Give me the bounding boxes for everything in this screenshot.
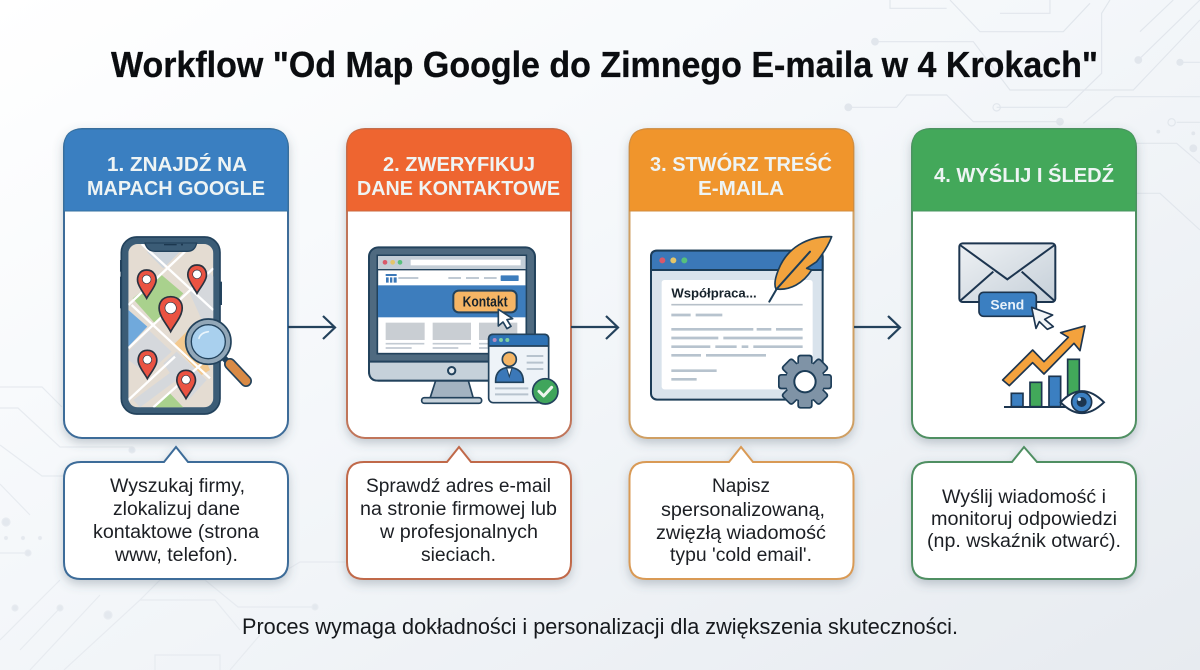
callout: step 1 description: Wyszukaj firmy, — [110, 476, 245, 497]
callout: step 2 description: na stronie firmowej lub — [360, 499, 557, 520]
callout: step 3 description: typu 'cold email'. — [670, 545, 812, 566]
callout: step 3 description: zwięzłą wiadomość — [656, 523, 826, 544]
callout: step 1 description: kontaktowe (strona — [93, 522, 259, 543]
icon: e-mail window with feather and gear: Współpraca... — [671, 285, 757, 300]
callout: step 2 description — [347, 447, 571, 579]
callout: step 3 description: spersonalizowaną, — [661, 500, 825, 521]
arrow: step 3 to step 4 — [854, 316, 900, 339]
callout: step 4 description — [912, 447, 1136, 579]
callout: step 3 description — [630, 447, 854, 579]
panel: step 3 create e-mail content — [630, 129, 854, 438]
callout: step 1 description: www, telefon). — [114, 545, 238, 566]
heading: step 2: 2. ZWERYFIKUJ — [383, 153, 535, 176]
panel: step 2 verify contact data — [347, 129, 571, 438]
heading: step 1: 1. ZNAJDŹ NA — [107, 153, 247, 176]
heading: step 1 — [87, 153, 265, 200]
heading: step 3 — [650, 152, 832, 200]
footer note: Proces wymaga dokładności i personalizacji dla zwiększenia skuteczności. — [242, 614, 958, 639]
callout: step 3 description: Napisz — [712, 476, 770, 497]
icon: smartphone with map, pins and magnifier — [120, 237, 246, 414]
heading: step 3: E-MAILA — [698, 177, 784, 200]
callout: step 2 description: w profesjonalnych — [379, 522, 538, 543]
callout: step 2 description: sieciach. — [421, 545, 496, 566]
arrow: step 1 to step 2 — [288, 316, 335, 339]
heading: step 4: 4. WYŚLIJ I ŚLEDŹ — [934, 163, 1114, 187]
icon: envelope with send button and growth chart — [959, 243, 1104, 413]
callout: step 4 description: (np. wskaźnik otwarć). — [927, 531, 1121, 552]
panel: step 4 send and track — [912, 129, 1136, 438]
heading: step 1: MAPACH GOOGLE — [87, 177, 265, 200]
icon: monitor with contact page and profile card — [369, 247, 558, 404]
icon: e-mail window with feather and gear — [651, 237, 832, 409]
callout: step 2 description: Sprawdź adres e-mail — [366, 476, 551, 497]
title: Workflow "Od Map Google do Zimnego E-maila w 4 Krokach" — [111, 44, 1098, 85]
callout: step 4 description: Wyślij wiadomość i — [942, 487, 1106, 508]
panel: step 1 find on Google Maps — [64, 129, 288, 438]
callout: step 4 description: monitoruj odpowiedzi — [931, 509, 1117, 530]
arrow: step 2 to step 3 — [571, 316, 618, 339]
heading: step 2 — [357, 153, 560, 200]
callout: step 1 description: zlokalizuj dane — [113, 499, 240, 520]
callout: step 1 description — [64, 447, 288, 579]
heading: step 2: DANE KONTAKTOWE — [357, 177, 560, 200]
icon: monitor with contact page and profile card: Kontakt — [463, 295, 508, 311]
heading: step 3: 3. STWÓRZ TREŚĆ — [650, 152, 832, 176]
icon: envelope with send button and growth chart: Send — [990, 296, 1024, 312]
